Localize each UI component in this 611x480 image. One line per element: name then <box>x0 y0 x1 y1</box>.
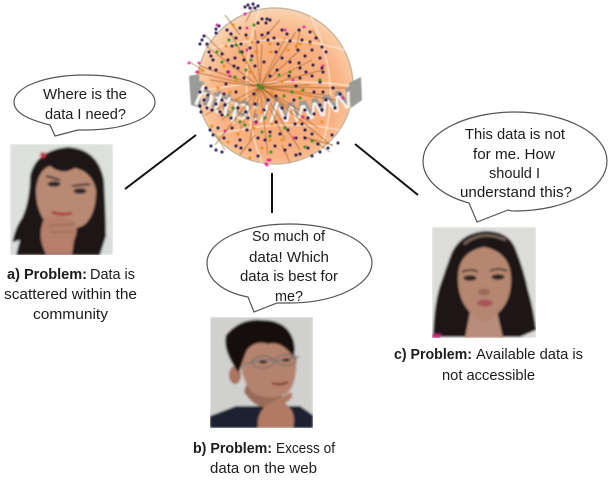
magenta nodes <box>189 14 343 165</box>
speech bubble c: This data is not <box>465 126 566 143</box>
speech bubble a <box>14 75 155 136</box>
speech bubble a: Where is the <box>43 86 127 103</box>
globe with network graph <box>186 2 362 168</box>
speech bubble b <box>207 224 372 312</box>
speech bubble b: So much of <box>252 228 326 245</box>
speech bubble b: data is best for <box>240 268 338 285</box>
web address band: http://www <box>194 84 350 124</box>
connector line to problem a <box>125 135 196 189</box>
speech bubble c: should I <box>489 165 540 182</box>
problem c caption <box>394 347 583 384</box>
problem c caption: Available data is <box>476 347 583 363</box>
connector line to problem c <box>355 144 418 195</box>
photo: boy b, thinking <box>210 317 313 428</box>
green nodes <box>217 25 320 152</box>
connector line to problem b <box>271 173 273 213</box>
speech bubble a: data I need? <box>45 106 126 123</box>
problem b caption: Excess of <box>276 441 336 457</box>
problem b caption: data on the web <box>210 461 317 477</box>
photo: girl c, tongue out <box>432 227 536 338</box>
web address band: http://www <box>199 80 351 121</box>
problem c caption: c) Problem: <box>394 347 472 363</box>
problem a caption: a) Problem: <box>7 267 87 283</box>
speech bubble b: data! Which <box>249 249 329 266</box>
network links <box>190 5 345 163</box>
speech bubble b: me? <box>275 288 303 305</box>
problem a caption: community <box>33 307 109 323</box>
problem c caption: not accessible <box>442 368 535 384</box>
problem a caption: scattered within the <box>4 287 137 303</box>
navy nodes <box>200 4 340 156</box>
speech bubble c: understand this? <box>460 184 572 201</box>
speech bubble c <box>423 112 607 222</box>
problem b caption: b) Problem: <box>193 441 272 457</box>
problem a caption <box>4 267 137 323</box>
problem a caption: Data is <box>90 267 135 283</box>
speech bubble c: for me. How <box>473 146 555 163</box>
problem b caption <box>193 441 336 477</box>
orange nodes <box>199 25 322 158</box>
photo: girl a, thinking <box>10 144 113 255</box>
